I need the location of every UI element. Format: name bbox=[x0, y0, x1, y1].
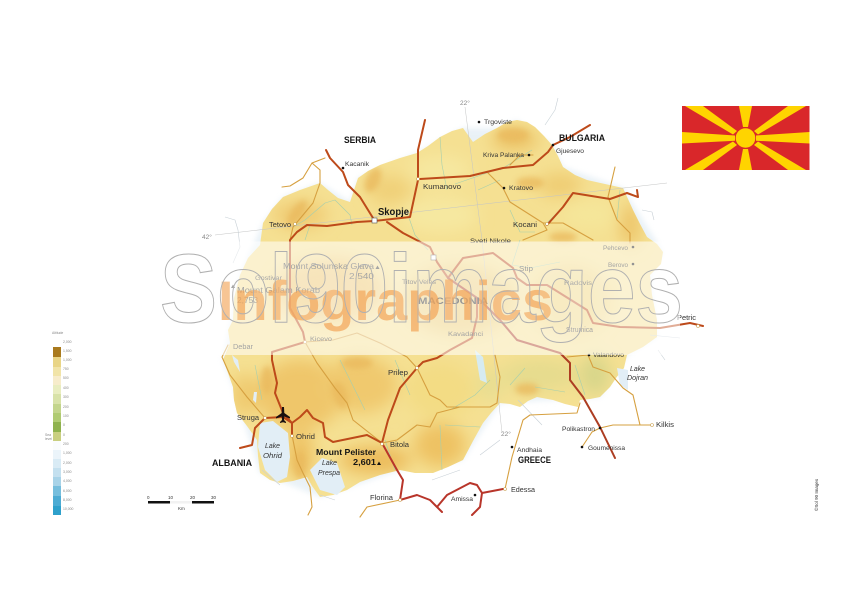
flag of Macedonia bbox=[682, 106, 810, 170]
label: Goumenissa: Goumenissa bbox=[588, 446, 626, 452]
altitude legend bbox=[45, 331, 73, 515]
watermark: infographics: Infographics bbox=[218, 269, 553, 332]
label: Tetovo: Tetovo bbox=[269, 222, 291, 229]
map outside glow bbox=[223, 120, 663, 497]
lake Debar bbox=[232, 355, 240, 372]
distance scale bar: 20 bbox=[190, 495, 196, 500]
label: Ohrid: Ohrid bbox=[296, 434, 315, 441]
label: Struga: Struga bbox=[237, 415, 259, 422]
label: Kacanik: Kacanik bbox=[345, 162, 370, 168]
lake Prespa bbox=[310, 458, 345, 495]
distance scale bar bbox=[147, 495, 217, 511]
rivers bbox=[225, 98, 680, 500]
label: Gostivar: Gostivar bbox=[255, 275, 283, 282]
label: 2,601: 2,601 bbox=[353, 457, 376, 467]
label: Petric: Petric bbox=[677, 315, 697, 322]
legend scale values: 1,500 bbox=[63, 349, 72, 353]
label: Lake Prespa bbox=[318, 460, 340, 477]
label: Lake Dojran bbox=[627, 366, 648, 382]
label: Prilep: Prilep bbox=[388, 370, 408, 377]
label: Radovis: Radovis bbox=[564, 281, 592, 287]
label: Edessa: Edessa bbox=[511, 487, 535, 494]
legend scale values: 1,000 bbox=[63, 451, 72, 455]
label: Kratovo: Kratovo bbox=[509, 186, 534, 192]
label: Bitola: Bitola bbox=[390, 442, 409, 449]
lake Mavrovo bbox=[253, 392, 257, 403]
label: Lake Ohrid: Ohrid bbox=[263, 453, 283, 460]
lakes bbox=[232, 350, 628, 495]
label: Titov Veles: Titov Veles bbox=[402, 279, 437, 286]
label: Stip: Stip bbox=[519, 266, 533, 273]
distance scale bar: 0 bbox=[147, 495, 150, 500]
label: Skopje: Skopje bbox=[378, 206, 409, 218]
lake Ohrid bbox=[258, 421, 290, 482]
legend scale values: 750 bbox=[63, 367, 69, 371]
label: Trgoviste: Trgoviste bbox=[484, 120, 513, 126]
icon: peak Korab bbox=[231, 284, 235, 288]
legend scale values: 6,000 bbox=[63, 489, 72, 493]
distance scale bar: 10 bbox=[168, 495, 174, 500]
legend scale values: 3,000 bbox=[63, 470, 72, 474]
label: Lake Prespa: Prespa bbox=[318, 470, 340, 477]
label: Andhaia: Andhaia bbox=[517, 448, 543, 454]
legend scale values: 100 bbox=[63, 414, 69, 418]
label: Gjuesevo: Gjuesevo bbox=[556, 149, 585, 155]
legend sea level: level bbox=[45, 437, 52, 441]
icon: peak Solunska bbox=[376, 266, 380, 269]
label: 22 degrees south: 22° bbox=[501, 430, 511, 438]
legend scale values: 2,000 bbox=[63, 340, 72, 344]
place dots bbox=[264, 121, 700, 501]
label: Kilkis: Kilkis bbox=[656, 422, 675, 429]
label: Amissa: Amissa bbox=[451, 497, 474, 503]
label: Pehcevo: Pehcevo bbox=[603, 246, 629, 252]
graticule lines bbox=[215, 107, 667, 433]
legend title: Altitude bbox=[52, 331, 63, 335]
legend sea level: Sea bbox=[45, 433, 51, 437]
legend scale values: 200 bbox=[63, 442, 69, 446]
label: Valandovo: Valandovo bbox=[593, 353, 625, 359]
legend scale values: 10,000 bbox=[63, 507, 73, 511]
label: Lake Prespa: Lake bbox=[322, 460, 337, 467]
legend scale values bbox=[63, 340, 73, 511]
legend scale values: 0 bbox=[63, 433, 65, 437]
label: Kicevo: Kicevo bbox=[310, 336, 332, 343]
lake Tikves bbox=[475, 350, 487, 383]
label: Serbia: SERBIA bbox=[344, 135, 376, 145]
label: Lake Dojran: Lake bbox=[630, 366, 645, 373]
legend sea level bbox=[45, 433, 52, 441]
watermark band bbox=[160, 242, 680, 355]
label: 2,753: 2,753 bbox=[237, 296, 259, 305]
label: Sveti Nikole: Sveti Nikole bbox=[470, 238, 511, 245]
map labels bbox=[202, 99, 697, 503]
label: Lake Ohrid: Lake bbox=[265, 443, 280, 450]
icon: airport plane bbox=[276, 407, 290, 423]
label: Polikastron: Polikastron bbox=[562, 427, 595, 433]
legend scale values: 300 bbox=[63, 395, 69, 399]
label: Mount Solunska Glava: Mount Solunska Glava bbox=[283, 262, 375, 271]
label: Mount Galam Korab: Mount Galam Korab bbox=[237, 286, 321, 295]
label: Macedonia: MACEDONIA bbox=[418, 296, 489, 306]
icon: peak Pelister bbox=[377, 462, 381, 465]
label: Strumica: Strumica bbox=[566, 327, 593, 334]
legend colour scale bbox=[53, 347, 61, 515]
legend scale values: 4,000 bbox=[63, 479, 72, 483]
watermark: Sol90images: Sol90images bbox=[160, 234, 683, 343]
legend scale values: 200 bbox=[63, 405, 69, 409]
distance scale bar: Km bbox=[178, 506, 185, 511]
minor roads bbox=[222, 155, 652, 517]
label: Mount Pelister: Mount Pelister bbox=[316, 447, 377, 457]
label: Bulgaria: BULGARIA bbox=[559, 133, 605, 143]
distance scale bar: 30 bbox=[211, 495, 217, 500]
label: Kavadanci: Kavadanci bbox=[448, 331, 483, 338]
lake Dojran bbox=[617, 368, 628, 390]
label: Kriva Palanka: Kriva Palanka bbox=[483, 153, 525, 159]
label: Lake Dojran: Dojran bbox=[627, 375, 648, 382]
label: Kocani: Kocani bbox=[513, 222, 537, 229]
label: 2,540: 2,540 bbox=[349, 272, 375, 281]
label: 42 degrees: 42° bbox=[202, 233, 212, 241]
label: 22 degrees north: 22° bbox=[460, 99, 470, 107]
label: Greece: GREECE bbox=[518, 455, 551, 465]
label: Kumanovo: Kumanovo bbox=[423, 184, 461, 191]
legend scale values: 500 bbox=[63, 376, 69, 380]
legend scale values: 400 bbox=[63, 386, 69, 390]
label: Berovo: Berovo bbox=[608, 263, 629, 269]
label: Debar: Debar bbox=[233, 344, 254, 351]
label: Lake Ohrid bbox=[263, 443, 283, 460]
legend scale values: 2,000 bbox=[63, 461, 72, 465]
map terrain bbox=[224, 120, 663, 497]
legend scale values: 8,000 bbox=[63, 498, 72, 502]
legend scale values: 0 bbox=[63, 423, 65, 427]
label: Albania: ALBANIA bbox=[212, 458, 252, 468]
major roads bbox=[240, 120, 703, 515]
label: Florina: Florina bbox=[370, 495, 393, 502]
legend scale values: 1,000 bbox=[63, 358, 72, 362]
image credit: ©Sol 90 Images bbox=[813, 478, 819, 511]
